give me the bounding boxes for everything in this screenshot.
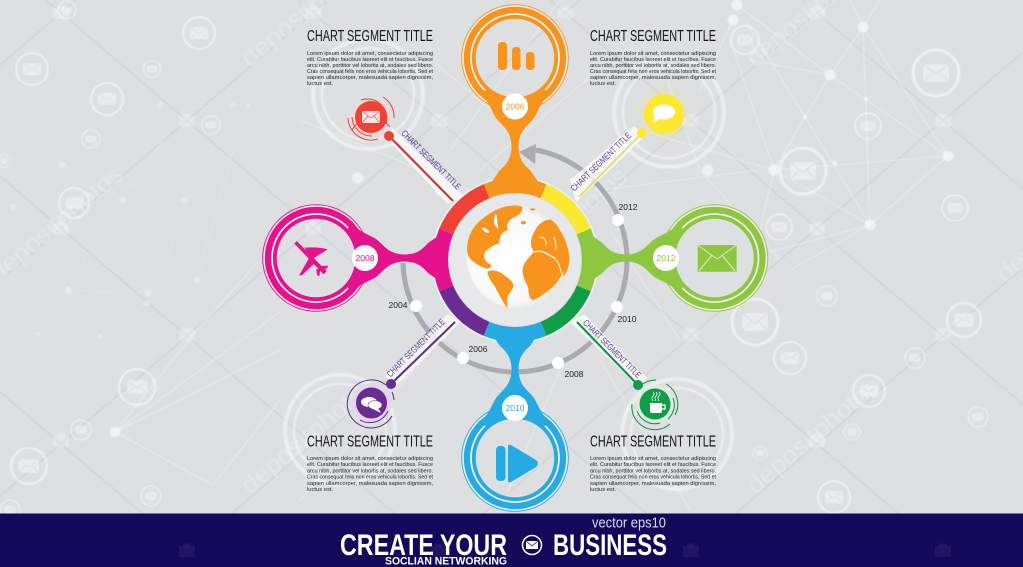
node: yellow (579, 88, 690, 197)
text block: top right: luctus est. (590, 81, 616, 87)
node: orange 2006 (462, 5, 568, 183)
text block: bottom left: luctus est. (307, 487, 333, 493)
node: magenta 2008: 2008 (356, 253, 375, 263)
text block: top left: arcu nibh, porttitor vel lobortis at, sodales sed libero. (307, 63, 433, 69)
timeline year markers: 2010 (618, 314, 637, 324)
text block: bottom right: luctus est. (590, 487, 616, 493)
text block: bottom right: Lorem ipsum dolor sit amet, consectetur adipiscing (590, 456, 716, 462)
text block: top right: CHART SEGMENT TITLE (590, 28, 716, 45)
central segmented ring (432, 177, 598, 343)
text block: top left: Cras consequat felis non eros vehicula lobortis. Sed et (307, 69, 433, 75)
timeline year markers: 2012 (619, 202, 638, 212)
banner heading: business: BUSINESS (553, 529, 667, 562)
faint white rings behind small nodes (285, 39, 732, 489)
icon: envelope (698, 245, 737, 272)
text block: top right: arcu nibh, porttitor vel lobortis at, sodales sed libero. (590, 63, 716, 69)
text block: top left: sapien ullamcorper, malesuada sapien dignissim, (307, 75, 433, 81)
node: orange 2006: 2006 (506, 102, 525, 112)
timeline year markers: 2004 (389, 300, 408, 310)
icon: bar chart (498, 42, 534, 70)
icon: envelope badge (522, 536, 542, 554)
text block: top left: elit. Curabitur faucibus laoreet elit et faucibus. Fusce (307, 57, 433, 63)
spoke label: yellow: CHART SEGMENT TITLE (569, 130, 633, 193)
node: dark green (577, 322, 678, 430)
node: magenta 2008 (263, 205, 441, 311)
icon: airplane (294, 241, 328, 276)
globe (466, 205, 570, 308)
text block: top left (307, 28, 433, 87)
spoke label: purple: CHART SEGMENT TITLE (385, 317, 447, 379)
text block: top right: elit. Curabitur faucibus laoreet elit et faucibus. Fusce (590, 57, 716, 63)
node: blue 2010: 2010 (506, 403, 525, 413)
text block: top right: Cras consequat felis non eros vehicula lobortis. Sed et (590, 69, 716, 75)
background network pattern: depositphotos (236, 372, 380, 500)
timeline year markers: 2008 (565, 369, 584, 379)
icon: envelope (362, 111, 380, 123)
icon: chat bubbles (361, 397, 382, 413)
label band: purple (386, 314, 460, 388)
text block: bottom left: CHART SEGMENT TITLE (307, 434, 433, 450)
text block: bottom right: Cras consequat felis non eros vehicula lobortis. Sed et (590, 474, 716, 480)
text block: top left: Lorem ipsum dolor sit amet, consectetur adipiscing (307, 51, 433, 57)
timeline year markers (389, 202, 638, 379)
text block: bottom right: elit. Curabitur faucibus laoreet elit et faucibus. Fusce (590, 462, 716, 468)
label band: yellow (570, 126, 645, 202)
text block: bottom left (307, 434, 433, 493)
text block: top right: sapien ullamcorper, malesuada sapien dignissim, (590, 75, 716, 81)
text block: bottom right: CHART SEGMENT TITLE (590, 434, 716, 450)
banner heading: create your: CREATE YOUR (340, 529, 507, 562)
text block: top right: Lorem ipsum dolor sit amet, consectetur adipiscing (590, 51, 716, 57)
label band: dark green (570, 314, 647, 388)
text block: bottom left: Lorem ipsum dolor sit amet, consectetur adipiscing (307, 456, 433, 462)
text block: bottom right (590, 434, 716, 493)
text block: top left: luctus est. (307, 81, 333, 87)
label band: red (388, 128, 464, 204)
text block: bottom right: arcu nibh, porttitor vel lobortis at, sodales sed libero. (590, 468, 716, 474)
text block: bottom left: arcu nibh, porttitor vel lobortis at, sodales sed libero. (307, 468, 433, 474)
node: red (348, 97, 453, 201)
icon: play (496, 445, 538, 482)
text block: bottom right: sapien ullamcorper, malesuada sapien dignissim, (590, 481, 716, 487)
text block: bottom left: Cras consequat felis non eros vehicula lobortis. Sed et (307, 474, 433, 480)
text block: top left: CHART SEGMENT TITLE (307, 28, 433, 45)
node: green 2012 (590, 205, 768, 311)
text block: bottom left: elit. Curabitur faucibus laoreet elit et faucibus. Fusce (307, 462, 433, 468)
spoke label: dark green: CHART SEGMENT TITLE (581, 318, 643, 380)
text block: bottom left: sapien ullamcorper, malesuada sapien dignissim, (307, 481, 433, 487)
node: blue 2010 (462, 333, 568, 511)
icon: coffee cup (650, 392, 665, 413)
timeline year markers: 2006 (469, 344, 488, 354)
node: green 2012: 2012 (657, 253, 676, 263)
background network pattern: depositphotos (489, 162, 633, 290)
timeline arc with arrow (403, 144, 627, 372)
footer banner (0, 514, 1023, 567)
node: purple (347, 322, 455, 428)
text block: top right (590, 28, 716, 87)
banner label: vector eps10: vector eps10 (592, 514, 666, 532)
background network pattern: depositphotos (741, 372, 885, 500)
icon: speech bubble (653, 104, 675, 123)
spoke label: red: CHART SEGMENT TITLE (399, 128, 463, 192)
